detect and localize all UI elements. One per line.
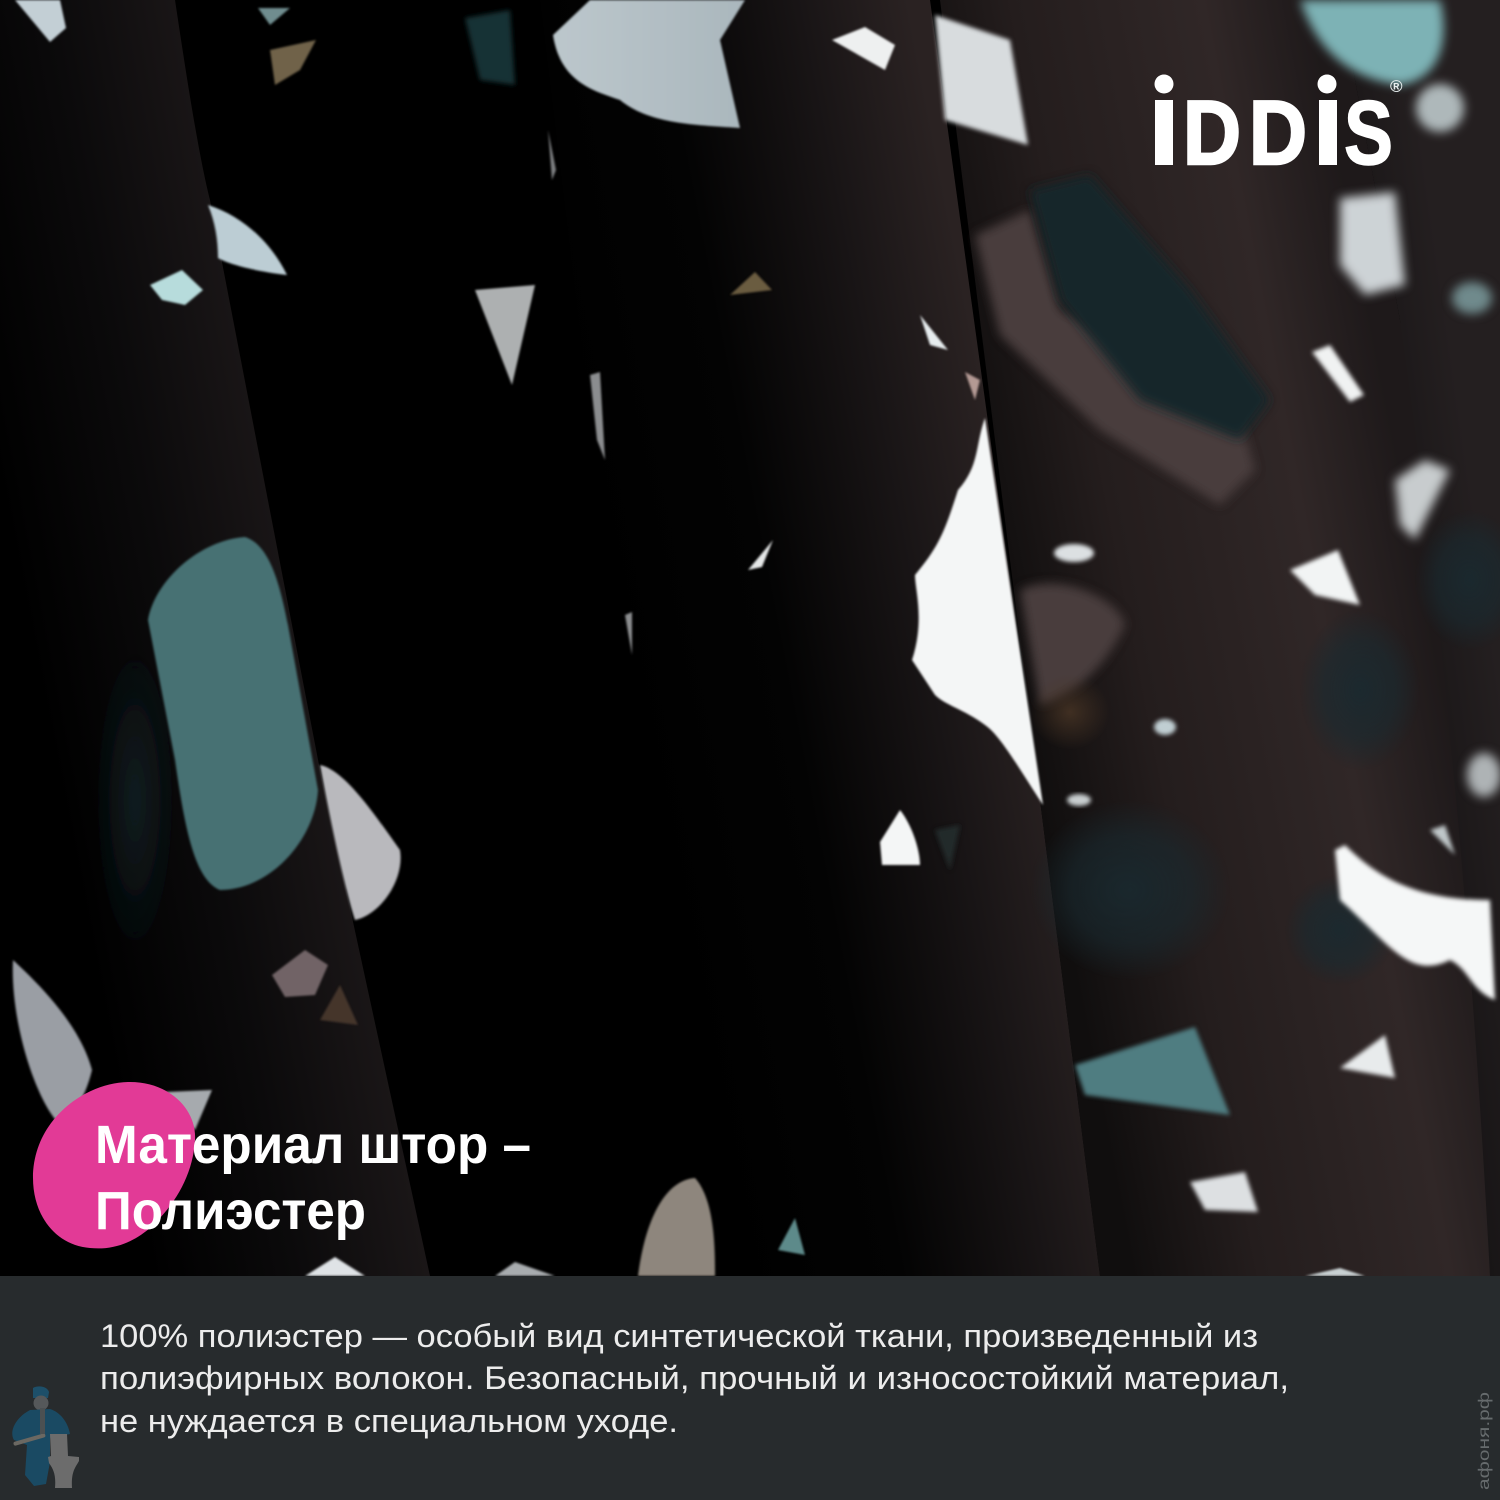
heading: Полиэстер — [95, 1181, 366, 1241]
logo: IDDIS — [1154, 74, 1403, 184]
heading — [95, 1115, 531, 1241]
logo: IDDIS: ® — [1390, 77, 1403, 96]
terrazzo pattern: left fold — [13, 0, 401, 1276]
heading: Материал штор – — [95, 1115, 531, 1175]
body text: не нуждается в специальном уходе. — [100, 1403, 678, 1439]
watermark: афоня.рф — [1476, 1392, 1493, 1490]
logo: IDDIS: D — [1249, 83, 1307, 184]
body text: 100% полиэстер — особый вид синтетической ткани, произведенный из — [100, 1318, 1258, 1354]
terrazzo pattern: top and centre fold — [258, 0, 1043, 1276]
pink blob behind heading — [33, 1082, 195, 1248]
logo: IDDIS: D — [1183, 83, 1241, 184]
bottom panel — [0, 1276, 1500, 1500]
body text — [100, 1318, 1289, 1439]
terrazzo pattern: right folds, out of focus — [495, 0, 1500, 1276]
body text: полиэфирных волокон. Безопасный, прочный и износостойкий материал, — [100, 1360, 1289, 1396]
icon: plumber with toilet — [12, 1386, 79, 1488]
logo: IDDIS: S — [1344, 83, 1393, 184]
